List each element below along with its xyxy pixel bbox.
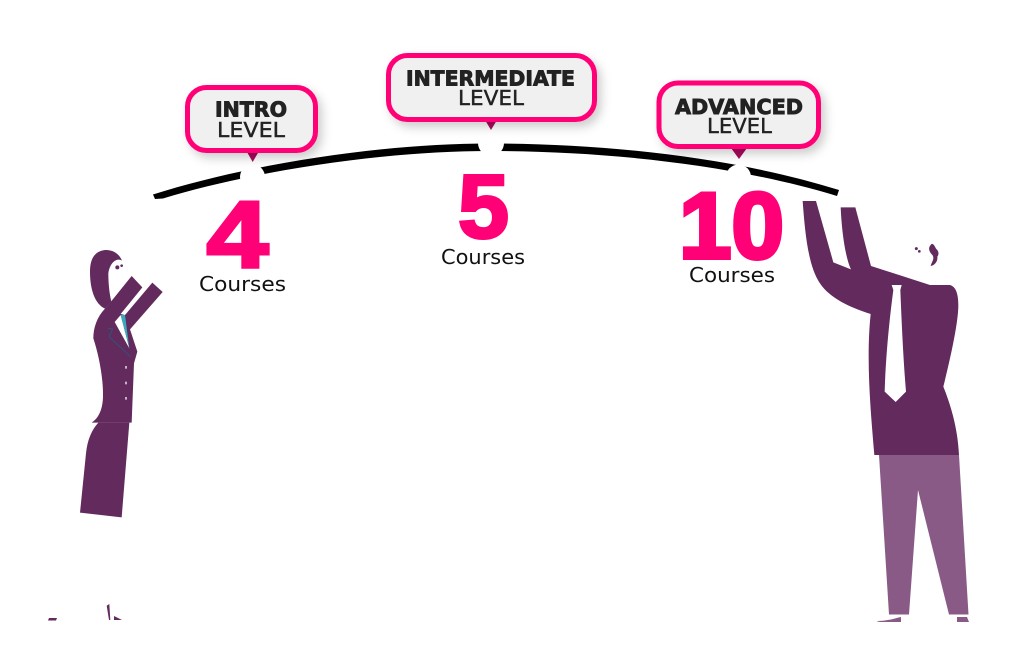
figure: woman <box>80 250 163 517</box>
figure: man <box>803 201 969 622</box>
callout: intermediate level: INTERMEDIATE <box>406 66 575 90</box>
callout: intermediate level: LEVEL <box>458 86 525 110</box>
callout: advanced level <box>659 83 818 159</box>
node: advanced <box>726 164 751 190</box>
man shoes <box>877 617 969 622</box>
woman lapel <box>108 328 131 357</box>
callout: advanced level: ADVANCED <box>675 95 803 119</box>
label: 5 courses: Courses <box>441 245 525 269</box>
woman jacket and arms <box>92 276 163 423</box>
arc line <box>153 144 839 199</box>
callout: intro level: INTRO <box>215 98 287 122</box>
label: 10 courses: Courses <box>689 263 775 287</box>
man tie <box>885 285 906 402</box>
callout: advanced level: LEVEL <box>707 114 773 138</box>
number: 4: 4 <box>206 182 269 288</box>
node: intermediate <box>478 130 504 156</box>
woman hair <box>90 250 122 309</box>
woman shirt <box>115 315 129 348</box>
woman collar <box>121 315 129 348</box>
man legs <box>879 455 968 614</box>
woman eyes <box>115 264 123 269</box>
man hair <box>915 244 938 266</box>
man torso and arms <box>803 201 959 455</box>
number: 5: 5 <box>458 158 509 258</box>
woman skirt <box>80 423 129 517</box>
callout: intermediate level <box>388 56 594 130</box>
woman buttons <box>125 366 127 400</box>
callout: intro level <box>188 88 316 162</box>
woman shoes <box>48 604 122 620</box>
callout: intro level: LEVEL <box>217 118 286 142</box>
number: 10: 10 <box>679 173 784 278</box>
label: 4 courses: Courses <box>199 272 286 296</box>
node: intro <box>240 164 265 190</box>
